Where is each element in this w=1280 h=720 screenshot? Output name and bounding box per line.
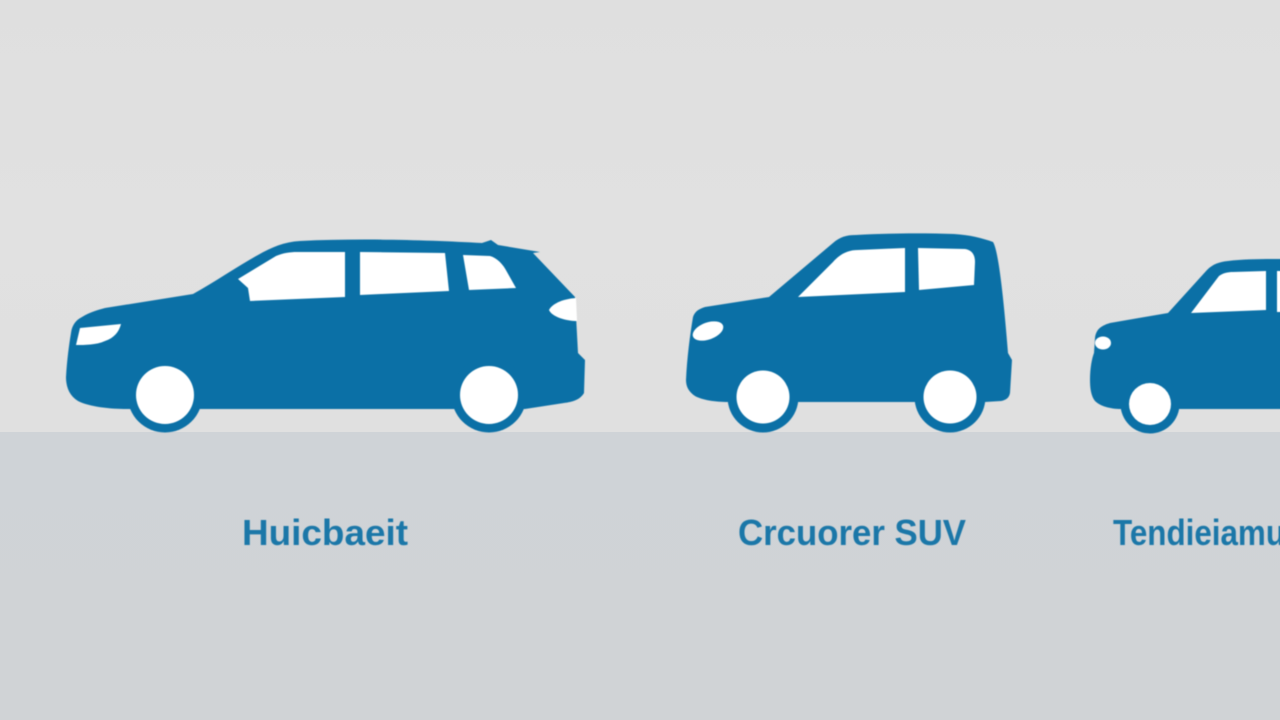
car body	[66, 240, 585, 409]
headlight	[1095, 336, 1111, 350]
front window	[798, 248, 905, 297]
background: upper wall	[0, 0, 1280, 432]
front wheel	[1129, 383, 1171, 425]
car body	[1090, 259, 1280, 409]
rear wheel arch	[914, 362, 986, 432]
front wheel arch	[1120, 374, 1180, 434]
headlight	[690, 318, 726, 344]
tail light	[549, 298, 577, 321]
label: crossover SUV: Crcuorer SUV	[738, 512, 966, 553]
front wheel	[136, 366, 194, 424]
rear window	[1277, 271, 1280, 312]
rear window	[463, 255, 516, 290]
middle window	[360, 252, 449, 295]
label: hatchback: Huicbaeit	[242, 512, 408, 553]
rear wheel arch	[452, 358, 526, 432]
icon: traditional car, cropped at right edge	[1090, 259, 1280, 434]
front wheel arch	[128, 358, 202, 432]
icon: crossover SUV car	[686, 233, 1012, 432]
front wheel	[736, 370, 790, 424]
front wheel arch	[728, 362, 798, 432]
background: lower ground band	[0, 432, 1280, 720]
front window	[238, 252, 345, 301]
headlight	[76, 324, 121, 345]
front window	[1191, 271, 1266, 313]
rear wheel	[460, 366, 518, 424]
icon: hatchback car	[66, 240, 585, 432]
car body	[686, 233, 1012, 402]
rear wheel	[924, 370, 976, 424]
rear window	[918, 248, 975, 290]
